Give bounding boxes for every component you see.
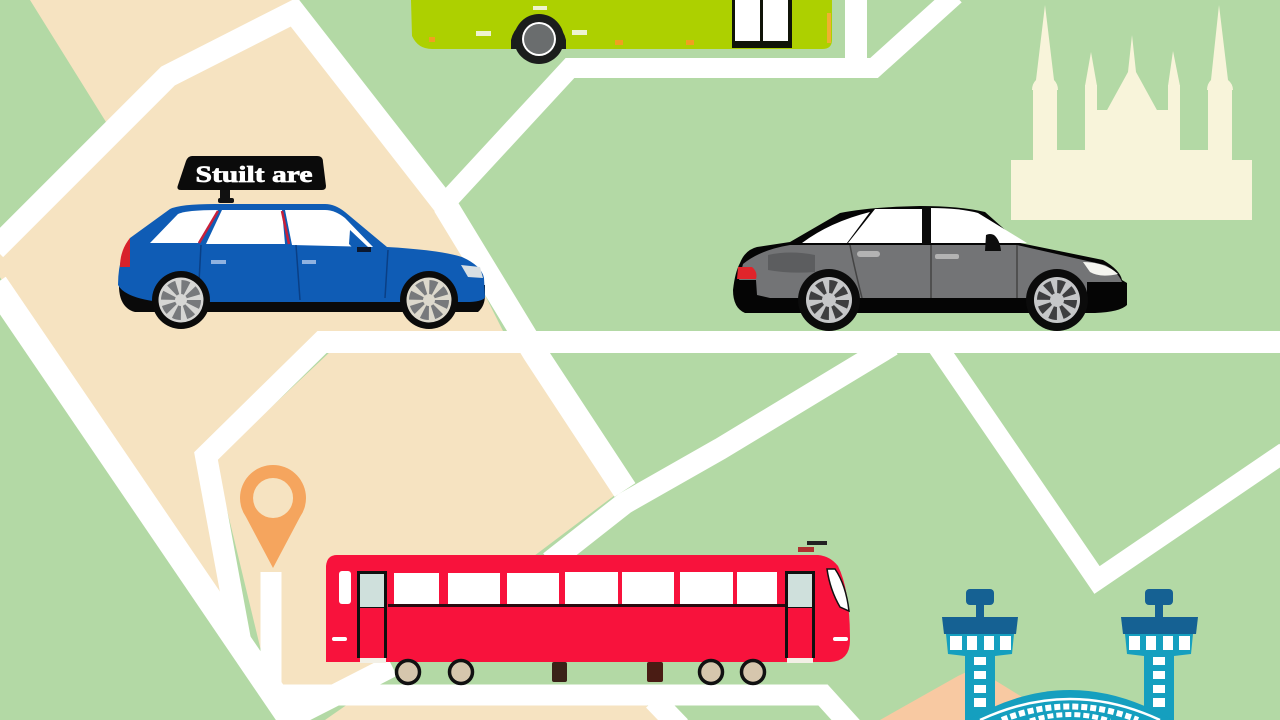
beige districts <box>0 0 668 720</box>
castle landmark <box>1011 5 1252 220</box>
left tower <box>942 589 1018 720</box>
red train <box>326 541 850 684</box>
location pin <box>240 465 306 568</box>
green bus <box>411 0 832 64</box>
roof sign <box>177 156 326 203</box>
blue car wheels <box>152 271 458 329</box>
roof sign: Stuilt are <box>196 162 312 187</box>
train wheels <box>396 660 764 684</box>
train windows <box>394 572 777 604</box>
right tower <box>1121 589 1198 720</box>
arch <box>968 690 1172 720</box>
grey car <box>733 206 1127 331</box>
blue car with roof sign <box>118 156 485 329</box>
grey car wheels <box>798 269 1088 331</box>
bridge with control towers <box>942 589 1198 720</box>
peach district <box>880 668 1022 720</box>
bus wheel <box>511 14 566 64</box>
